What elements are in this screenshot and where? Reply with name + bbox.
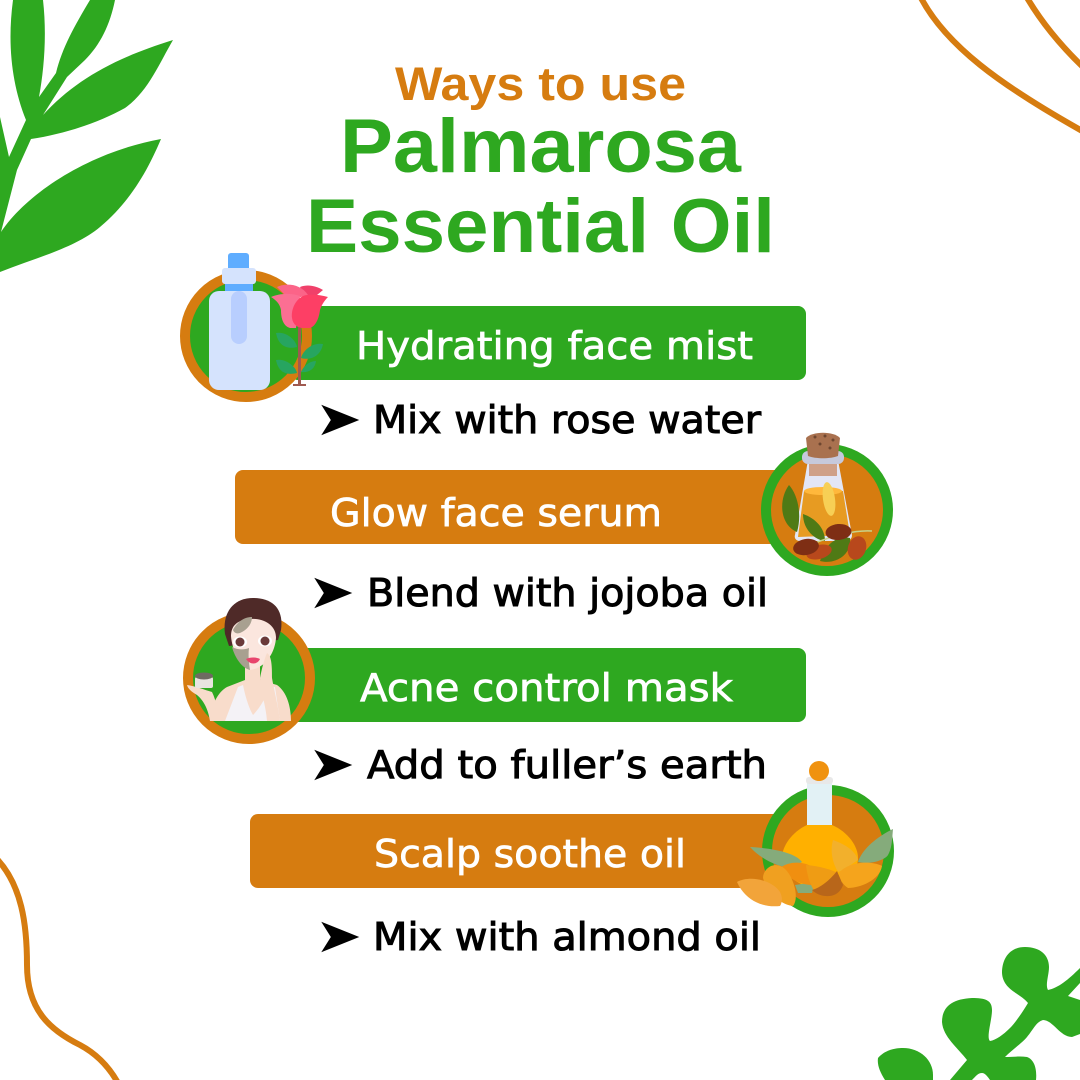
banner: glow face serum: Glow face serum <box>330 491 662 535</box>
title line: palmarosa: Palmarosa <box>340 104 742 189</box>
decoration: orange curves top right <box>920 0 1080 132</box>
banner: scalp soothe oil <box>250 814 795 888</box>
instruction: mix with rose water: Mix with rose water <box>373 398 761 442</box>
instruction: blend with jojoba oil <box>308 564 768 620</box>
instruction: add to fuller's earth <box>308 736 767 792</box>
banner: hydrating face mist <box>290 306 806 380</box>
banner: hydrating face mist: Hydrating face mist <box>356 324 753 368</box>
instruction: mix with almond oil: ➤ <box>315 908 362 964</box>
decoration: orange curve bottom left <box>0 858 118 1080</box>
instruction: add to fuller's earth: Add to fuller’s earth <box>367 743 767 787</box>
icon: face mist bottle and rose <box>185 253 328 397</box>
instruction: add to fuller's earth: ➤ <box>308 736 355 792</box>
banner: scalp soothe oil: Scalp soothe oil <box>374 832 686 876</box>
banner: glow face serum <box>235 470 795 544</box>
title line: ways to use: Ways to use <box>395 57 686 110</box>
icon: woman applying face mask <box>187 598 310 739</box>
instruction: blend with jojoba oil: Blend with jojoba oil <box>367 571 768 615</box>
instruction: blend with jojoba oil: ➤ <box>308 564 355 620</box>
title line: essential oil: Essential Oil <box>306 184 775 269</box>
instruction: mix with rose water <box>315 391 761 447</box>
instruction: mix with almond oil: Mix with almond oil <box>373 915 761 959</box>
decoration: green leaves bottom right <box>878 947 1080 1080</box>
icon: almond oil flask <box>737 761 893 912</box>
banner: acne control mask: Acne control mask <box>360 666 733 710</box>
banner: acne control mask <box>290 648 806 722</box>
icon: jojoba oil bottle <box>766 433 888 571</box>
decoration: green leaves top left <box>0 0 173 272</box>
instruction: mix with almond oil <box>315 908 761 964</box>
instruction: mix with rose water: ➤ <box>315 391 362 447</box>
title <box>306 57 775 269</box>
